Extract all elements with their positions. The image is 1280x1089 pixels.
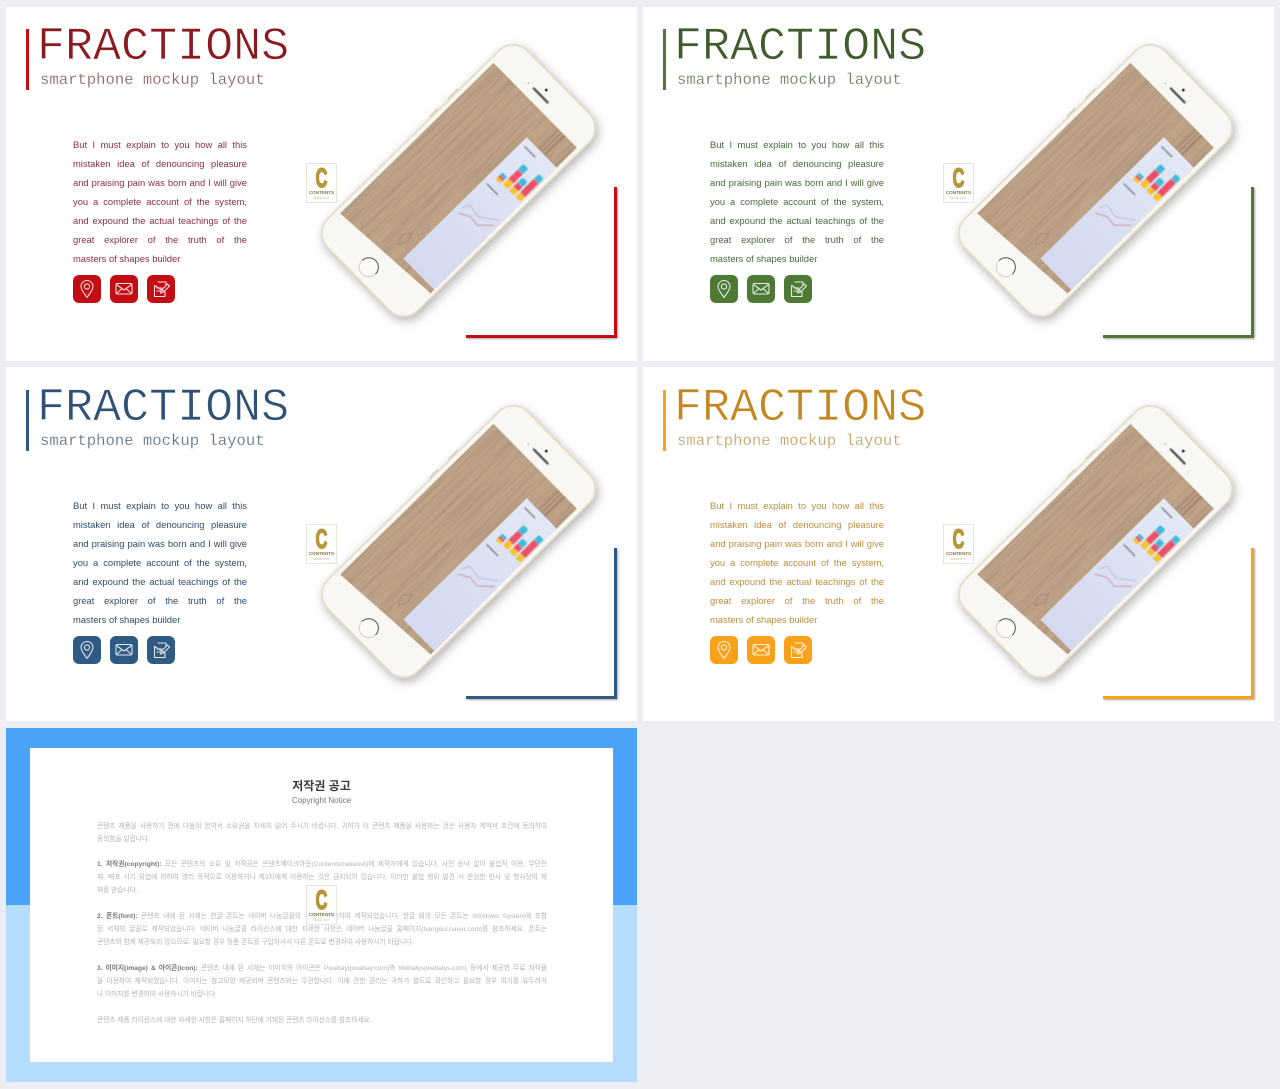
logo watermark [306,163,337,203]
text block: great explorer of the truth of the [73,234,247,245]
panel: navy slide [6,367,637,721]
logo watermark: MAKE OUT [951,557,966,561]
section: font: 2. 폰트(font): 콘텐츠 내에 된 서체는 한글 폰트는 네이버 나눔글꼴의 서체를 사용하여 제작되었습니다. 한글 외의 모든 폰트는 Windows System에 포함 [97,913,547,920]
text block: But I must explain to you how all this [710,500,884,511]
accent bar [663,390,666,451]
logo watermark: C [316,163,327,193]
text block: mistaken idea of denouncing pleasure [73,519,247,530]
icon: document with pencil [147,275,175,303]
intro text [97,822,547,843]
text block: masters of shapes builder [73,614,180,625]
logo watermark: CONTENTS [309,190,334,195]
corner bracket [466,548,617,699]
corner bracket [466,187,617,338]
heading: FRACTIONS [674,21,926,74]
accent bar [26,390,29,451]
panel: green slide [643,7,1274,361]
section: font: 된 서체의 글꼴로 제작되었습니다. 네이버 나눔글꼴 라이선스에 대한 자세한 사항은 네이버 나눔글꼴 홈페이지(hangeul.naver.com)를 참조하세요. 폰트는 [97,926,547,933]
section: copyright: 1. 저작권(copyright): 모든 콘텐츠의 소유 및 저작권은 콘텐츠메이크아웃(Contentsmakeout)에 제작자에게 있습니다. 사전 승낙 없이 불법적 이용, 무단전 [97,861,547,868]
heading: FRACTIONS [37,21,289,74]
text block: and expound the actual teachings of the [73,215,247,226]
text block: you a complete account of the system, [710,557,884,568]
intro text: 콘텐츠 제품을 사용하기 전에 다음의 한약서 소유권을 자세히 읽어 주시기 바랍니다. 귀하가 이 콘텐츠 제품을 사용하는 것은 사용자 계약서 조건에 동의하여 [97,823,547,830]
intro text: 동의함을 알립니다. [97,836,150,843]
logo watermark [306,524,337,564]
notice heading: 저작권 공고 [292,779,351,793]
section: copyright: 재를 받습니다. [97,887,138,894]
logo watermark: CONTENTS [946,551,971,556]
text block: and praising pain was born and I will give [710,538,884,549]
text block: mistaken idea of denouncing pleasure [73,158,247,169]
icon: envelope [110,275,138,303]
section: image and icon: 나 이미지를 변경하여 사용하시기 바랍니다. [97,991,217,998]
icon: document with pencil [784,636,812,664]
text block [710,139,884,264]
text block: great explorer of the truth of the [710,234,884,245]
text block [73,500,247,625]
section: image and icon: 을 이용하여 제작되었습니다. 이미지는 참고모양 제공되며 콘텐츠와는 무관합니다. 이에 관한 권리는 귀하가 별도로 확인하고 필요할 경우 여기를 유두하거 [97,978,547,985]
corner bracket [1103,548,1254,699]
text block: and praising pain was born and I will give [710,177,884,188]
logo watermark [943,524,974,564]
text block: mistaken idea of denouncing pleasure [710,519,884,530]
corner bracket [1103,187,1254,338]
icon: envelope [747,275,775,303]
logo watermark: MAKE OUT [314,557,329,561]
logo watermark: CONTENTS [946,190,971,195]
logo watermark [306,885,337,925]
logo watermark: MAKE OUT [314,918,329,922]
smartphone mockup [318,403,604,687]
text block: masters of shapes builder [710,253,817,264]
subheading: smartphone mockup layout [40,432,265,450]
logo watermark: CONTENTS [309,912,334,917]
icon: document with pencil [784,275,812,303]
notice subheading: Copyright Notice [292,796,351,805]
text block: masters of shapes builder [710,614,817,625]
text block: But I must explain to you how all this [710,139,884,150]
heading: FRACTIONS [37,382,289,435]
section: image and icon: 3. 이미지(image) & 아이콘(icon): 콘텐츠 내에 된 서체는 이미지와 아이콘은 Pixabay(pixabay.com)와 Webalys(webalys.com) 등에서 제공한 무료 저작물 [97,965,547,972]
logo watermark: C [316,524,327,554]
icon: document with pencil [147,636,175,664]
panel: orange slide [643,367,1274,721]
closing line: 콘텐츠 제품 라이선스에 대한 자세한 사항은 홈페이지 하단에 기재된 콘텐츠 라이선스를 참조하세요. [97,1017,372,1024]
subheading: smartphone mockup layout [40,71,265,89]
section: copyright [97,860,547,894]
heading: FRACTIONS [674,382,926,435]
subheading: smartphone mockup layout [677,71,902,89]
icon: location pin [710,275,738,303]
icon: envelope [110,636,138,664]
section: copyright: 재, 배포 시기 위법에 의하여 영리 목적으로 이용하거나 제3자에게 이용하는 것은 금지되어 있습니다. 이러한 불법 행위 발견 시 준엄한 민사 및 형사상의 제 [97,874,547,881]
icon: location pin [73,636,101,664]
logo watermark: MAKE OUT [314,196,329,200]
text block: But I must explain to you how all this [73,500,247,511]
section: image and icon [97,964,547,998]
logo watermark: C [953,163,964,193]
logo watermark: C [316,885,327,915]
smartphone mockup [955,42,1240,326]
logo watermark: CONTENTS [309,551,334,556]
text block: great explorer of the truth of the [73,595,247,606]
text block: and expound the actual teachings of the [73,576,247,587]
smartphone mockup [318,42,604,326]
subheading: smartphone mockup layout [677,432,902,450]
text block [73,139,247,264]
smartphone mockup [955,403,1240,687]
panel: red slide [6,7,637,361]
panel: copyright notice [6,728,637,1082]
text block: and praising pain was born and I will give [73,177,247,188]
icon: location pin [710,636,738,664]
section: font: 콘텐츠와 함께 제공되지 않으므로, 필요할 경우 정품 폰트를 구입하셔서 다른 폰트로 변경하여 사용하시기 바랍니다. [97,939,414,946]
icon: location pin [73,275,101,303]
logo watermark: MAKE OUT [951,196,966,200]
icon: envelope [747,636,775,664]
logo watermark: C [953,524,964,554]
accent bar [26,29,29,90]
section: font [97,912,547,946]
text block: and expound the actual teachings of the [710,215,884,226]
text block: mistaken idea of denouncing pleasure [710,158,884,169]
text block: masters of shapes builder [73,253,180,264]
text block: and expound the actual teachings of the [710,576,884,587]
text block: you a complete account of the system, [73,557,247,568]
text block: you a complete account of the system, [710,196,884,207]
accent bar [663,29,666,90]
notice card [30,748,613,1062]
text block [710,500,884,625]
text block: you a complete account of the system, [73,196,247,207]
text block: and praising pain was born and I will give [73,538,247,549]
logo watermark [943,163,974,203]
text block: But I must explain to you how all this [73,139,247,150]
text block: great explorer of the truth of the [710,595,884,606]
